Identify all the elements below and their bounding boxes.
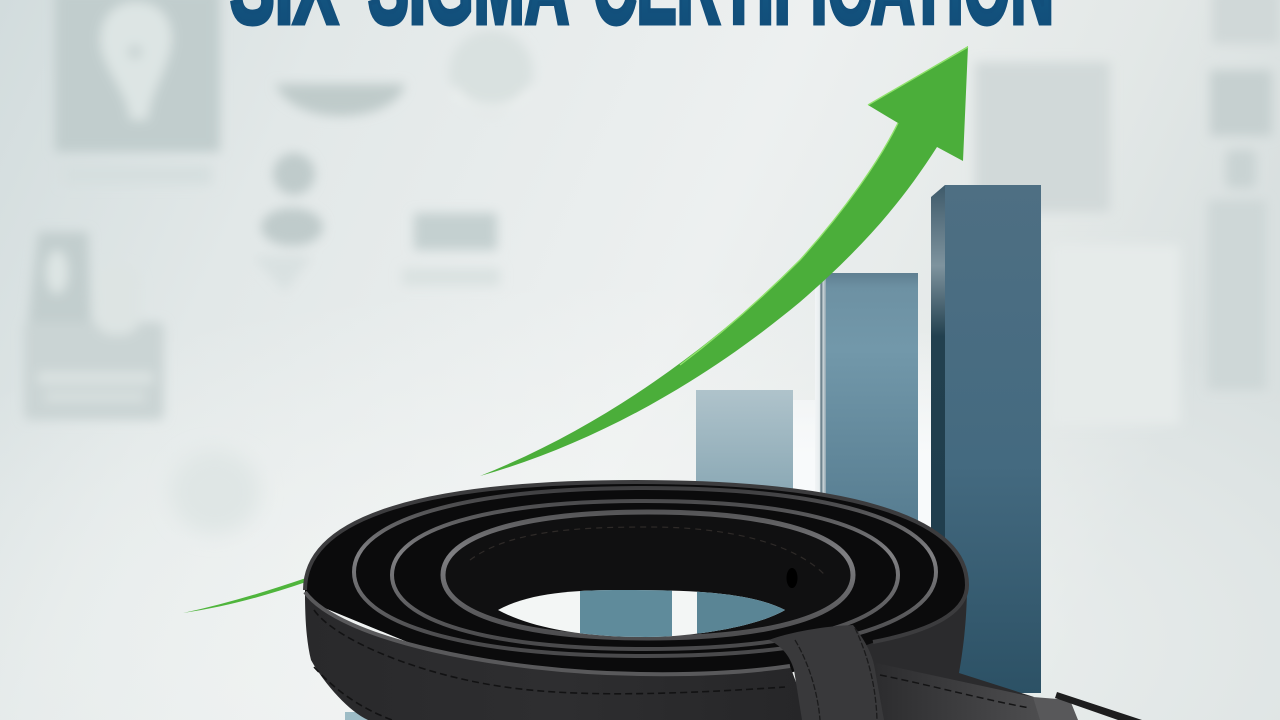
arrow: rising growth arrow (480, 46, 968, 476)
belt: right outer side (860, 585, 1034, 720)
bright gaps between bars (793, 330, 931, 540)
icon: lightbulb tile (55, 0, 220, 185)
belt: outer rim (305, 482, 967, 642)
blurred background icons (24, 0, 1280, 534)
belt: keeper loop (769, 625, 884, 720)
bar: small (696, 390, 793, 525)
bar: tall (931, 185, 1041, 693)
belt: inner stitching (470, 527, 825, 575)
bar: medium (815, 273, 918, 528)
icon: bowl (275, 84, 405, 116)
icon: target ring (449, 30, 533, 114)
belt: lower stitching (314, 667, 392, 720)
belt: inner coil (443, 512, 853, 638)
icon: person (252, 153, 323, 292)
icon: screen (402, 213, 500, 286)
icon: faint globe (170, 450, 260, 534)
belt: strap stitching (880, 675, 1030, 708)
belt: front band (305, 592, 810, 720)
icon: lock and card (24, 232, 164, 420)
belt: strap end (870, 663, 1078, 720)
bar chart (696, 185, 1041, 693)
belt: buckle (1033, 692, 1142, 720)
icon: right lock column (1208, 0, 1280, 390)
belt: opening with bars visible (498, 590, 785, 637)
belt: third coil (392, 501, 898, 649)
belt: lower teal sliver (345, 712, 373, 720)
belt: front band rim (305, 592, 790, 674)
title (230, 0, 1054, 47)
belt: coil body (305, 482, 967, 680)
icon: right panel (975, 62, 1180, 425)
belt: second coil (354, 488, 936, 656)
belt: upper stitching (314, 610, 785, 694)
belt (305, 482, 1142, 720)
background floor glow (0, 200, 1280, 720)
arrow: tail segment (183, 578, 306, 613)
belt: punched hole (786, 568, 798, 588)
